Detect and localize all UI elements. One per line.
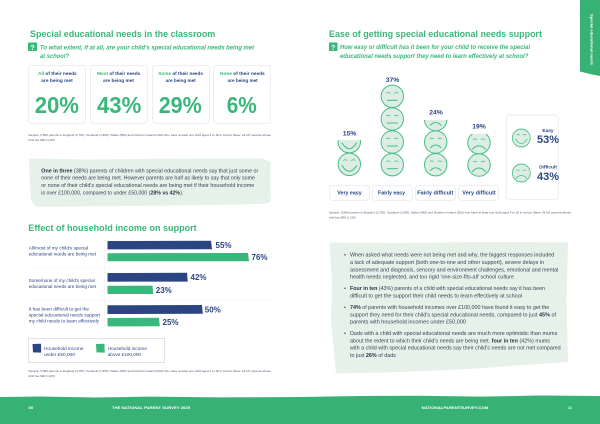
row: all or most needs met: All/most of my child's special [29, 246, 88, 252]
section tab: Special educational needs [590, 14, 594, 65]
card: none: are being met [228, 78, 258, 83]
sample note: ease: Sample: 5,866 parents in England (3,781), Scotland (1,805), Wales (865) and Northern Ireland (300) who have at least one child aged 4 to 18 in school. Base: All UK parents whose [329, 211, 571, 215]
sample note: income: Sample: 5,866 parents in England (3,781), Scotland (1,805), Wales (865) and Northern Ireland (300) who have at least one child aged 4 to 18 in school. Base: All UK parents whose [28, 369, 271, 373]
finding: biggest responses: health needs neglected, and too rigid 'one-size-fits-all' school culture [350, 275, 514, 281]
card: none: None of their needs [220, 71, 265, 76]
label: very difficult: Very difficult [462, 190, 496, 196]
row: some or none needs met [29, 273, 207, 295]
sample note: income: child has SEN (1,215) [28, 374, 55, 378]
pictogram chart: faces [338, 77, 490, 176]
bar chart: household income [28, 240, 272, 328]
finding: biggest responses: When asked what needs were not being met and why, the biggest responses included [350, 252, 554, 258]
finding: 74 percent [344, 305, 557, 326]
finding: four in ten: Four in ten (43%) parents of a child with special educational needs say it has been [350, 286, 545, 292]
legend: under 50k [32, 344, 84, 357]
finding: dads: • [344, 331, 346, 337]
finding: 74 percent: parents with household incomes under £50,000 [350, 320, 466, 326]
column: fairly difficult 24%: 24% [429, 110, 443, 117]
sample note: ease [329, 211, 571, 220]
row: all or most needs met [29, 241, 268, 262]
legend: above 100k: above £100,000 [108, 352, 141, 357]
label: fairly easy [372, 185, 412, 200]
panel: key findings [329, 242, 568, 374]
summary box: easy vs difficult [506, 115, 559, 199]
card: some: 29% [159, 92, 202, 118]
column: fairly easy 37%: 37% [386, 77, 399, 84]
label: fairly difficult [416, 185, 455, 200]
finding: dads: to just 26% of dads [350, 353, 396, 359]
card: all: are being met [41, 78, 73, 83]
callout: one in three [29, 158, 271, 207]
card: none: 6% [227, 92, 257, 118]
icon: question mark [28, 42, 37, 52]
icon: question mark: ? [331, 45, 335, 52]
finding: 74 percent: support they need for their child's special educational needs, compared to just 45% of [350, 312, 557, 318]
footer left title: THE NATIONAL PARENT SURVEY 2025 [112, 405, 191, 410]
row: difficult to get support: my child needs to learn effectively [29, 319, 100, 325]
row: all or most needs met: educational needs are being met [29, 252, 97, 258]
card: most: are being met [103, 78, 134, 83]
summary: easy: Easy [542, 128, 554, 134]
footer left page number: 30 [28, 405, 34, 410]
column: very easy 15% [338, 130, 360, 176]
sample note: classroom: Sample: 5,866 parents in England (3,781), Scotland (1,805), Wales (865) and Northern Ireland (300) who have at least one child aged 4 to 18 in school. Base: All UK parents whose [28, 133, 271, 137]
finding: 74 percent: 74% of parents with household incomes over £100,000 have found it easy to get the [350, 305, 549, 311]
finding: four in ten [344, 286, 545, 300]
row: some or none needs met: Some/none of my child's special [29, 278, 95, 284]
heading: household income: Effect of household income on support [28, 223, 197, 233]
finding: dads: Dads with a child with special educational needs are much more optimistic than mums [350, 331, 558, 337]
heading: classroom: Special educational needs in the classroom [30, 29, 215, 39]
sample note: classroom: child has SEN (1,215) [28, 138, 55, 142]
column: very difficult 19%: 19% [472, 124, 486, 131]
finding: dads [344, 331, 561, 359]
callout: one in three: or none of their child's special educational needs are being met if their household income [41, 183, 254, 189]
legend: under 50k: Household income [44, 346, 84, 351]
label: very easy: Very easy [337, 190, 362, 196]
heading: ease of support: Ease of getting special educational needs support [329, 29, 542, 39]
sample note: income [28, 369, 271, 378]
column: fairly easy 37% [381, 77, 403, 176]
finding: biggest responses: a lack of adequate support (both one-to-one and other support), severe delays in [350, 260, 544, 266]
row: difficult to get support: special educational needs support [29, 312, 101, 318]
finding: biggest responses [344, 252, 558, 281]
card: all: 20% [35, 92, 79, 118]
question: ease: educational needs support they need to learn effectively at school? [340, 53, 528, 60]
finding: biggest responses: assessment and diagnosis, sensory and environment challenges, emotional and mental [350, 268, 558, 274]
summary: easy: 53% [537, 134, 559, 146]
card: some: are being met [166, 78, 196, 83]
card: all [28, 65, 85, 123]
sample note: ease: child has SEN (1,215) [329, 216, 356, 220]
row: difficult to get support: 50% [205, 306, 221, 314]
stat cards [28, 65, 270, 123]
question text: To what extent, if at all, are your child's special educational needs being met [40, 44, 255, 52]
card: some [153, 65, 209, 123]
finding: four in ten: difficult to get the support their child needs to learn effectively at school [350, 294, 522, 300]
card: most: Most of their needs [97, 71, 141, 76]
category labels [329, 185, 499, 200]
row: some or none needs met: educational needs are being met [29, 284, 97, 290]
summary: difficult: Difficult [539, 165, 557, 171]
footer band [0, 396, 600, 424]
question: classroom: at school? [40, 53, 69, 60]
row: some or none needs met: 23% [156, 286, 172, 295]
legend: above 100k [96, 344, 147, 357]
row: difficult to get support [29, 305, 221, 327]
row: difficult to get support: It has been difficult to get the [29, 306, 89, 312]
column: very difficult 19% [468, 124, 490, 176]
row: some or none needs met: 42% [190, 273, 206, 282]
finding: 74 percent: • [344, 305, 346, 311]
finding: four in ten: • [344, 286, 346, 292]
column: fairly difficult 24% [424, 108, 447, 176]
row: all or most needs met: 55% [216, 241, 232, 250]
label: fairly easy: Fairly easy [378, 190, 405, 196]
legend: under 50k: under £50,000 [44, 352, 75, 357]
column: very easy 15%: 15% [343, 131, 356, 138]
callout: one in three: is over £100,000, compared to under £50,000 (28% vs 42%). [41, 190, 183, 196]
label: very difficult [459, 185, 499, 200]
footer right page number: 31 [568, 405, 573, 410]
finding: dads: about the extent to which their child's needs are being met. four in ten (42%) mums [350, 338, 550, 344]
section tab [580, 0, 600, 76]
question: ease [329, 42, 530, 60]
icon: question mark [329, 42, 338, 52]
finding: dads: with a child with special educational needs say their child's needs are not met compared [349, 346, 561, 352]
card: some: Some of their needs [158, 71, 203, 76]
question: classroom [28, 42, 255, 60]
card: most: 43% [97, 92, 141, 118]
card: none [214, 65, 270, 123]
summary: difficult: 43% [537, 171, 559, 183]
row: difficult to get support: 25% [162, 318, 178, 327]
legend: above 100k: Household income [108, 346, 147, 351]
footer website: NATIONALPARENTSURVEY.COM [422, 405, 489, 410]
card: most [91, 65, 147, 123]
icon: question mark: ? [30, 45, 35, 52]
callout: one in three: none of their needs are being met. However parents are half as likely to say that only some [41, 176, 255, 182]
finding: biggest responses: • [344, 252, 346, 258]
summary: easy [512, 128, 559, 147]
legend [28, 338, 165, 363]
label: fairly difficult: Fairly difficult [417, 190, 454, 196]
sample note: classroom [28, 133, 271, 142]
card: all: All of their needs [38, 71, 77, 76]
callout: one in three: One in three (38%) parents of children with special educational needs say that just some or [41, 168, 258, 174]
row: all or most needs met: 76% [252, 253, 268, 262]
question text: How easy or difficult has it been for your child to receive the special [340, 44, 530, 51]
label: very easy [329, 185, 369, 200]
summary: difficult [512, 164, 559, 183]
